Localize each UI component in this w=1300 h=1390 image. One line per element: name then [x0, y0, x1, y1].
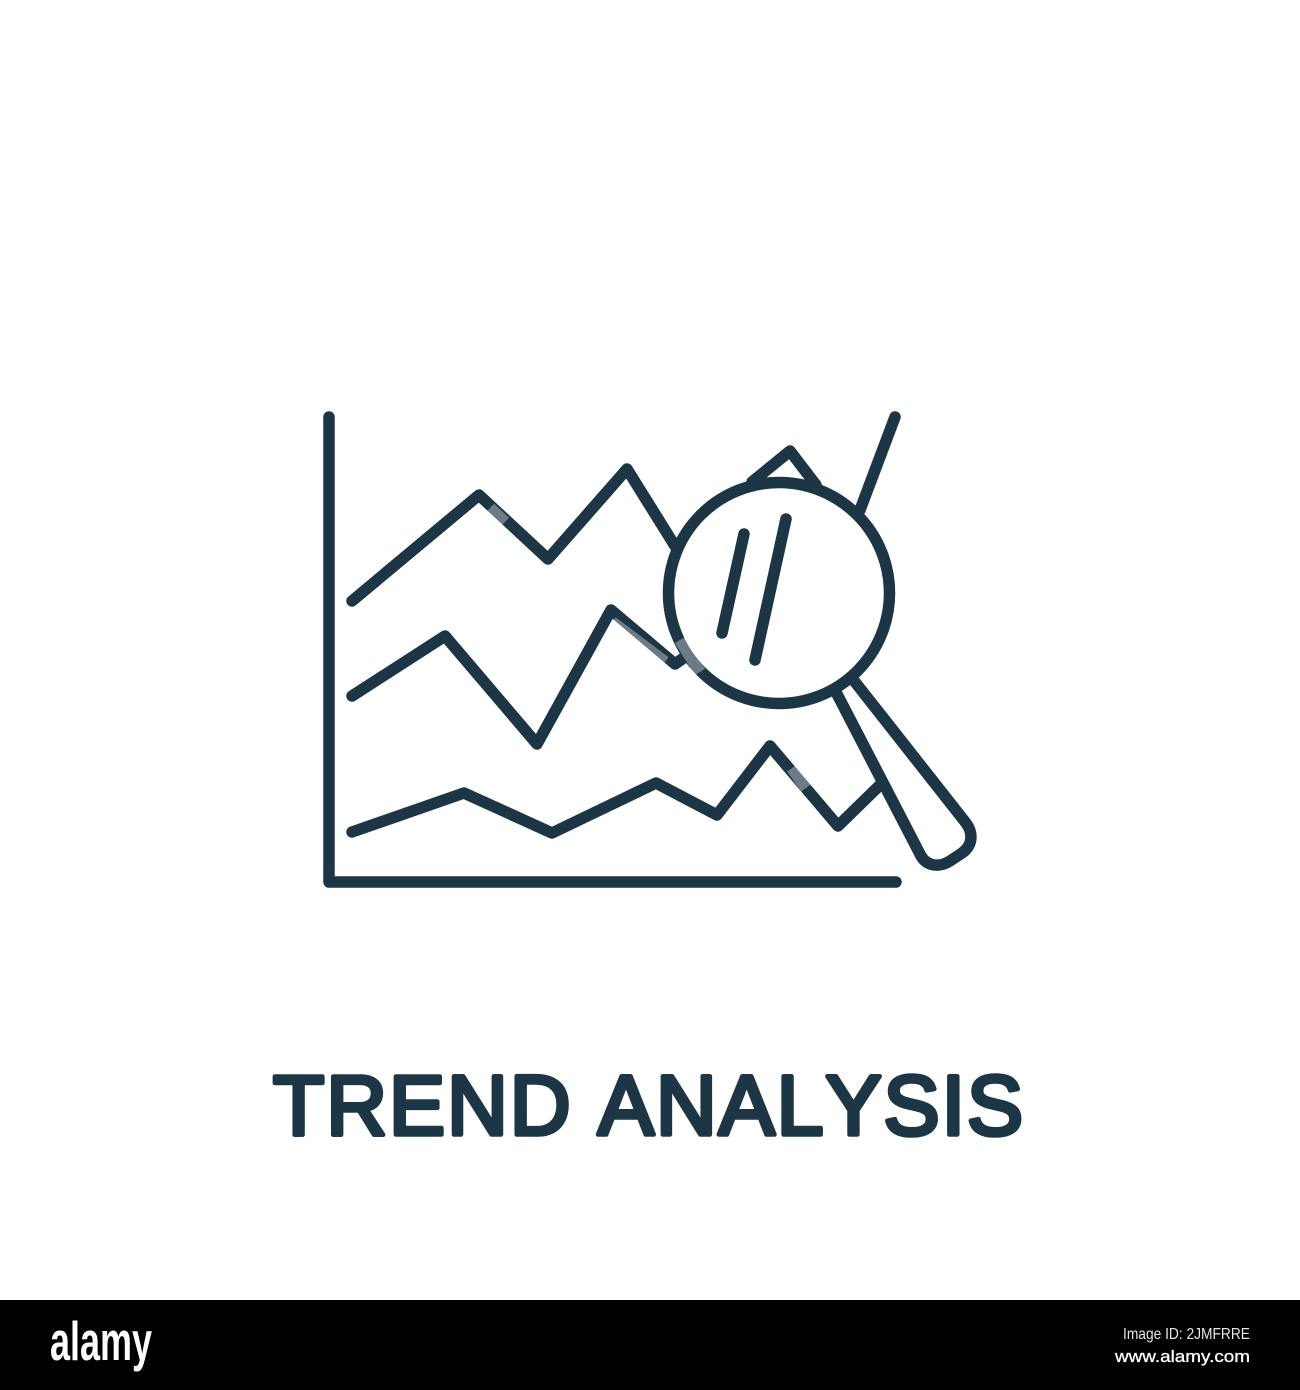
- image id: Image ID: 2JMFRRE: [1123, 1326, 1250, 1343]
- magnifying glass handle: [837, 682, 971, 865]
- trend line: top exit behind lens: [860, 417, 895, 510]
- icon: trend chart with magnifying glass: [329, 417, 971, 882]
- footer logo: alamy: [50, 1310, 152, 1372]
- lens glare: short: [722, 534, 744, 633]
- title: TREND ANALYSIS: [273, 1058, 1023, 1152]
- trend line: bottom: [352, 746, 880, 833]
- trend line: top: [352, 469, 675, 601]
- magnifying glass lens: [668, 482, 890, 704]
- lens glare: long: [755, 519, 786, 660]
- footer bar: [0, 1300, 1300, 1390]
- website: www.alamy.com: [1114, 1347, 1250, 1366]
- chart axes: [329, 417, 896, 882]
- trend line: middle: [352, 610, 692, 744]
- trend line: top peak behind lens: [752, 451, 816, 485]
